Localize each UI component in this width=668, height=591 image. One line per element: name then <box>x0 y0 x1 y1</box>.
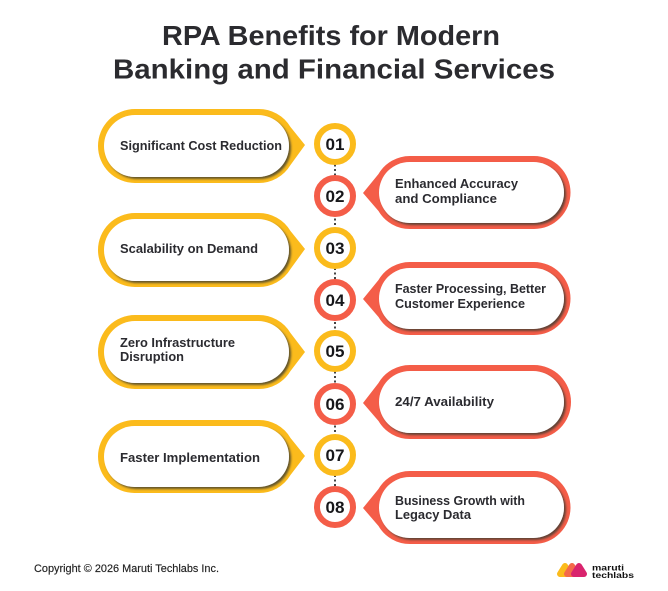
pill: Enhanced Accuracy and Compliance: and Compliance <box>395 192 497 206</box>
pill: Business Growth with Legacy Data: Business Growth with <box>395 494 525 508</box>
logo <box>560 562 634 580</box>
title: RPA Benefits for Modern <box>162 20 500 51</box>
pill: Enhanced Accuracy and Compliance: Enhanced Accuracy <box>395 177 518 191</box>
logo: techlabs <box>592 570 634 580</box>
step 06 <box>317 365 571 439</box>
number badge 04: 04 <box>326 292 345 310</box>
pill: Scalability on Demand <box>98 213 305 287</box>
number badge 01 <box>317 126 353 162</box>
pill: Business Growth with Legacy Data: Legacy Data <box>395 508 472 522</box>
pill: Faster Processing, Better Customer Experience: Faster Processing, Better <box>395 282 546 296</box>
pill: Significant Cost Reduction: Significant Cost Reduction <box>120 139 282 153</box>
number badge 08 <box>317 489 353 525</box>
number badge 03: 03 <box>326 240 344 258</box>
number badge 08: 08 <box>326 499 344 517</box>
pill: Significant Cost Reduction <box>98 109 305 183</box>
step 08 <box>317 471 570 544</box>
pill: Faster Implementation: Faster Implementation <box>120 451 260 465</box>
pill: Enhanced Accuracy and Compliance <box>363 156 570 229</box>
step 07 <box>98 420 353 493</box>
pill: Faster Processing, Better Customer Experience <box>363 262 570 335</box>
number badge 06: 06 <box>326 396 344 414</box>
step 02 <box>317 156 570 229</box>
pill: Faster Processing, Better Customer Experience: Customer Experience <box>395 297 525 311</box>
pill: Business Growth with Legacy Data <box>363 471 570 544</box>
pill: Zero Infrastructure Disruption <box>98 315 305 389</box>
number badge 07 <box>317 437 353 473</box>
number badge 07: 07 <box>326 447 344 465</box>
number badge 02 <box>317 178 353 214</box>
number badge 01: 01 <box>326 136 344 154</box>
step 05 <box>98 315 353 389</box>
number badge 03 <box>317 230 353 266</box>
connector: dotted timeline <box>334 160 336 490</box>
pill: 24/7 Availability: 24/7 Availability <box>395 395 494 409</box>
copyright: Copyright © 2026 Maruti Techlabs Inc. <box>34 563 219 575</box>
pill: 24/7 Availability <box>363 365 571 439</box>
step 01 <box>98 109 353 183</box>
pill: Scalability on Demand: Scalability on Demand <box>120 242 258 256</box>
number badge 04 <box>317 282 353 318</box>
number badge 05 <box>317 333 353 369</box>
step 03 <box>98 213 353 287</box>
logo: maruti <box>592 562 624 572</box>
number badge 06 <box>317 386 353 422</box>
number badge 05: 05 <box>326 343 344 361</box>
title <box>113 20 555 84</box>
step 04 <box>317 262 570 335</box>
pill: Faster Implementation <box>98 420 305 493</box>
number badge 02: 02 <box>326 188 344 206</box>
title: Banking and Financial Services <box>113 54 555 84</box>
pill: Zero Infrastructure Disruption: Zero Infrastructure <box>120 336 235 350</box>
pill: Zero Infrastructure Disruption: Disruption <box>120 350 184 364</box>
icon: logo mark <box>560 566 584 574</box>
